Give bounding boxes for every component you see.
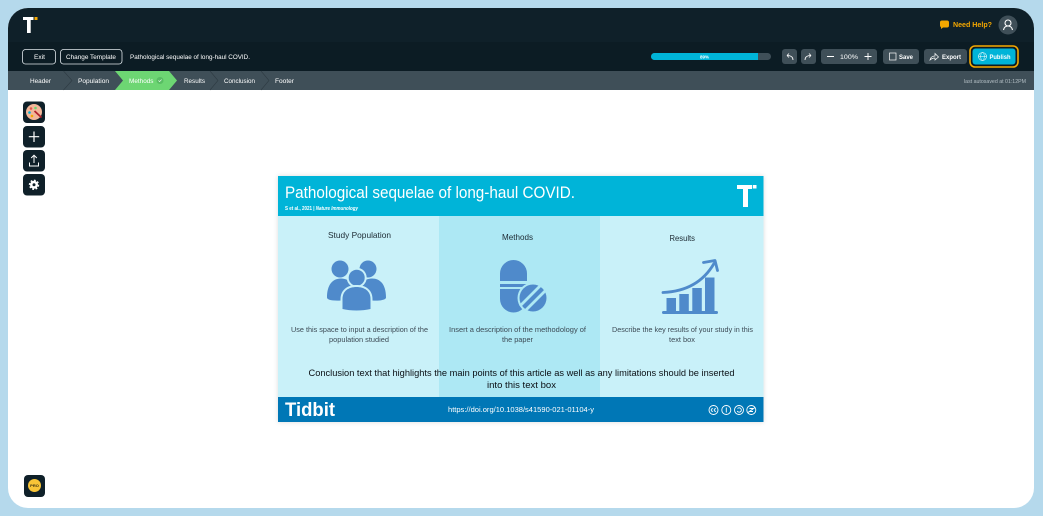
undo button <box>782 49 797 64</box>
footer band <box>278 397 764 422</box>
description: population: Use this space to input a description of the <box>291 325 428 334</box>
panel: methods <box>449 232 587 344</box>
step: conclusion: Conclusion <box>224 78 255 85</box>
export button: Export <box>942 54 962 61</box>
description: results <box>612 325 753 344</box>
infographic card <box>278 176 764 422</box>
publish button <box>970 46 1018 67</box>
change template button <box>60 50 122 64</box>
step: methods active: Methods <box>129 78 154 85</box>
progress bar: 89% <box>700 54 709 60</box>
panel: methods column <box>439 216 600 397</box>
icon: user avatar <box>998 16 1018 34</box>
description: population <box>292 326 428 344</box>
conclusion text: Conclusion text that highlights the main points of this article as well as any limitations should be inserted <box>308 368 734 379</box>
publish button: Publish <box>990 54 1011 61</box>
need help link: Need Help? <box>953 22 992 29</box>
step: methods active <box>115 71 177 90</box>
progress bar <box>651 53 771 60</box>
heading: study population: Study Population <box>328 230 391 240</box>
icon: add button <box>23 126 45 148</box>
description: population: population studied <box>329 335 389 344</box>
footer logo: Tidbit <box>285 400 336 421</box>
citation: S et al., 2021 | Nature Immunology <box>285 206 358 212</box>
icon: rising bar chart <box>662 260 718 314</box>
step: header: Header <box>30 78 52 85</box>
conclusion text <box>308 368 734 391</box>
icon: people group <box>327 260 386 313</box>
top bar <box>8 8 1034 71</box>
description: methods: Insert a description of the methodology of <box>449 325 587 334</box>
step: footer: Footer <box>275 78 295 85</box>
zoom control <box>821 49 877 64</box>
icon: header logo <box>737 185 756 207</box>
icon: pills <box>500 260 548 314</box>
icon: pro badge <box>24 475 45 497</box>
description: results: Describe the key results of your study in this <box>612 325 753 334</box>
save button <box>883 49 919 64</box>
step: population: Population <box>78 78 109 85</box>
icon: Tidbit logo <box>23 17 38 33</box>
document title: Pathological sequelae of long-haul COVID. <box>130 54 250 61</box>
exit button: Exit <box>34 54 45 61</box>
save button: Save <box>899 54 913 61</box>
step: results: Results <box>184 78 206 85</box>
panel: study population <box>291 230 428 344</box>
redo button <box>801 49 816 64</box>
export button <box>924 49 967 64</box>
exit button <box>22 50 56 64</box>
heading: results: Results <box>670 233 695 243</box>
icon: creative commons badges <box>709 406 756 414</box>
step navigation bar <box>8 71 1034 90</box>
description: methods <box>449 325 587 344</box>
icon: upload button <box>23 150 45 172</box>
icon: palette button <box>23 102 45 123</box>
icon: pro badge: PRO <box>30 483 39 488</box>
heading: methods: Methods <box>502 232 533 242</box>
autosave status: last autosaved at 01:12PM <box>964 79 1026 85</box>
description: results: text box <box>669 335 695 344</box>
description: methods: the paper <box>502 335 533 344</box>
change template button: Change Template <box>66 54 116 61</box>
panel: results <box>612 233 753 344</box>
conclusion text: into this text box <box>487 380 556 391</box>
side toolbar <box>23 102 45 497</box>
title: Pathological sequelae of long-haul COVID. <box>285 183 575 202</box>
header band <box>278 176 764 216</box>
need help link <box>940 20 992 29</box>
doi link: https://doi.org/10.1038/s41590-021-01104-y <box>448 405 594 414</box>
zoom control: 100% <box>840 54 858 61</box>
icon: settings button <box>23 174 45 196</box>
